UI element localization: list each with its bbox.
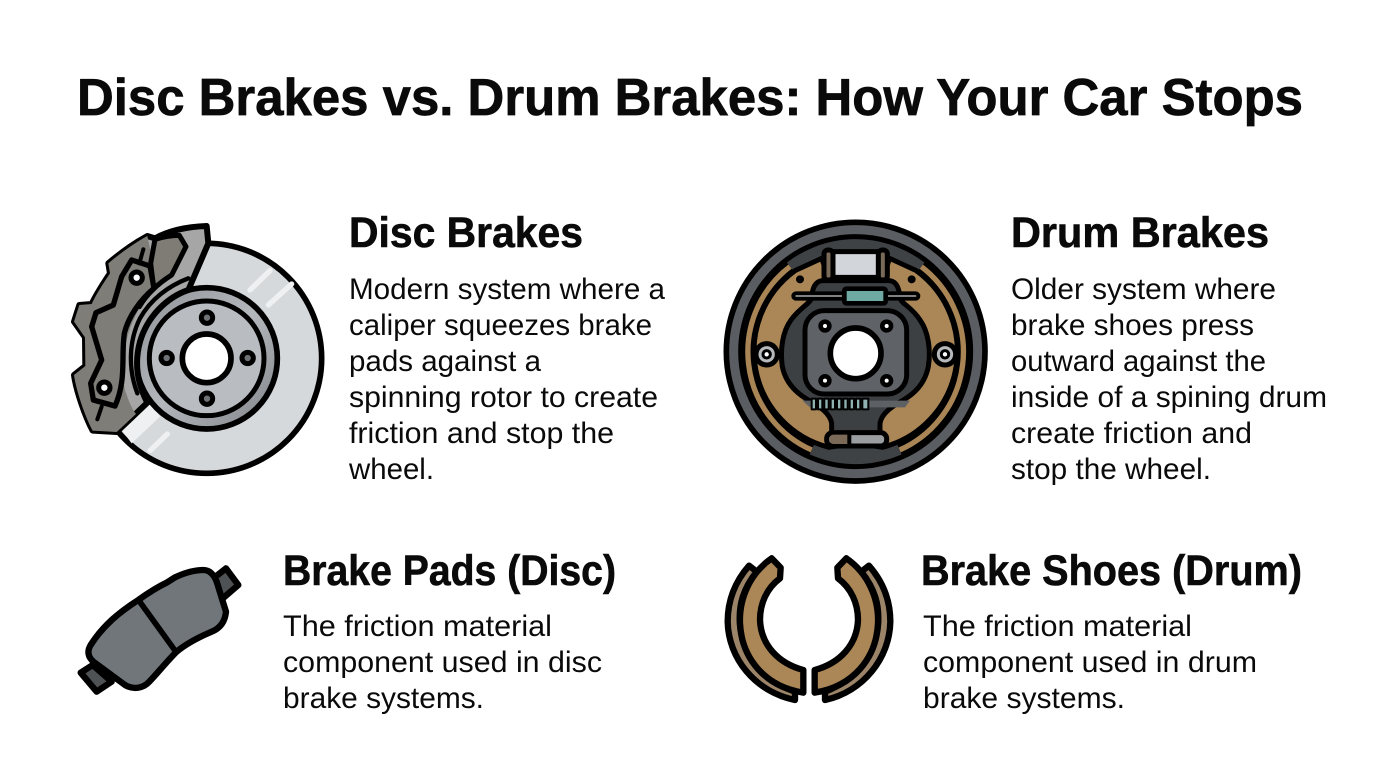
text block: drum brakes description: create friction and [1011, 417, 1252, 450]
text block: brake shoes description: component used in drum [923, 646, 1257, 679]
icon: brake shoes [728, 558, 890, 700]
text block: disc brakes description [348, 273, 666, 486]
text block: drum brakes description: outward against the [1011, 345, 1266, 378]
text block: brake pads description [283, 610, 602, 715]
panel: brake shoes [728, 547, 1302, 715]
text block: drum brakes description: brake shoes press [1011, 309, 1254, 342]
heading: brake pads: Brake Pads (Disc) [283, 547, 616, 595]
heading: disc brakes: Disc Brakes [349, 209, 583, 257]
heading: brake shoes: Brake Shoes (Drum) [921, 547, 1302, 595]
panel: brake pads [81, 547, 616, 715]
text block: brake pads description: component used in disc [283, 646, 602, 679]
icon: disc brake rotor and caliper [74, 226, 322, 473]
icon: brake pad [81, 568, 238, 692]
text block: disc brakes description: wheel. [348, 453, 434, 486]
panel: drum brakes [726, 209, 1327, 486]
text block: brake shoes description [923, 610, 1257, 715]
text block: drum brakes description: Older system where [1011, 273, 1276, 306]
caliper body [74, 226, 208, 432]
text block: disc brakes description: Modern system where a [349, 273, 666, 306]
text block: disc brakes description: spinning rotor to create [349, 381, 658, 414]
text block: brake pads description: brake systems. [283, 682, 484, 715]
text block: disc brakes description: pads against a [349, 345, 542, 378]
title: Disc Brakes vs. Drum Brakes: How Your Car Stops [77, 69, 1303, 127]
panel: disc brakes [74, 209, 666, 486]
text block: drum brakes description: stop the wheel. [1011, 453, 1211, 486]
icon: drum brake assembly [726, 222, 985, 481]
text block: drum brakes description [1011, 273, 1327, 486]
text block: disc brakes description: caliper squeezes brake [349, 309, 652, 342]
text block: disc brakes description: friction and stop the [349, 417, 614, 450]
text block: drum brakes description: inside of a spining drum [1011, 381, 1327, 414]
text block: brake shoes description: The friction material [923, 610, 1192, 643]
text block: brake shoes description: brake systems. [923, 682, 1125, 715]
heading: drum brakes: Drum Brakes [1011, 209, 1269, 257]
text block: brake pads description: The friction material [283, 610, 552, 643]
